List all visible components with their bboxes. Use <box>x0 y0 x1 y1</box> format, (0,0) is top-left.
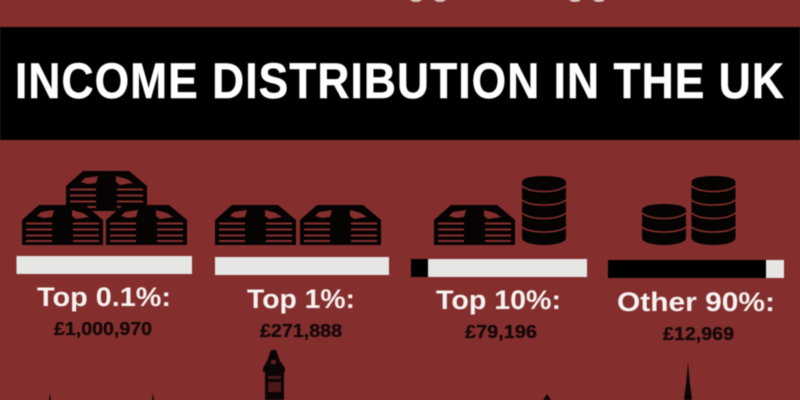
bar: other 90% <box>608 260 784 278</box>
value: top 1%: £271,888 <box>260 321 342 341</box>
label: other 90%: Other 90%: <box>617 287 775 317</box>
value: top 0.1%: £1,000,970 <box>54 319 152 339</box>
title banner <box>0 27 800 140</box>
icon: clock tower <box>263 350 285 400</box>
icon: three stacks of notes <box>22 171 187 245</box>
value: top 10%: £79,196 <box>465 322 537 342</box>
panel: top 10% <box>411 176 587 342</box>
bar: top 10% <box>411 259 587 277</box>
panel: other 90% <box>608 176 784 344</box>
bar: top 0.1% <box>16 256 192 274</box>
icon: coin stacks <box>642 176 736 245</box>
icon: notes and coins <box>434 176 566 245</box>
icon: small spire centre-left <box>152 393 154 400</box>
icon: roof peak <box>543 394 551 400</box>
label: top 10%: Top 10%: <box>436 285 561 315</box>
label: top 0.1%: Top 0.1%: <box>37 282 171 312</box>
panel: top 0.1% <box>16 171 192 339</box>
icon: small spire left <box>49 393 51 400</box>
icon: spire <box>684 362 692 400</box>
icon: two stacks of notes <box>215 205 381 245</box>
clipped heading remnants <box>410 0 604 2</box>
panel: top 1% <box>215 205 389 341</box>
bar: top 1% <box>215 257 389 275</box>
value: other 90%: £12,969 <box>663 324 734 344</box>
skyline silhouette <box>49 350 692 400</box>
label: top 1%: Top 1%: <box>247 284 355 314</box>
